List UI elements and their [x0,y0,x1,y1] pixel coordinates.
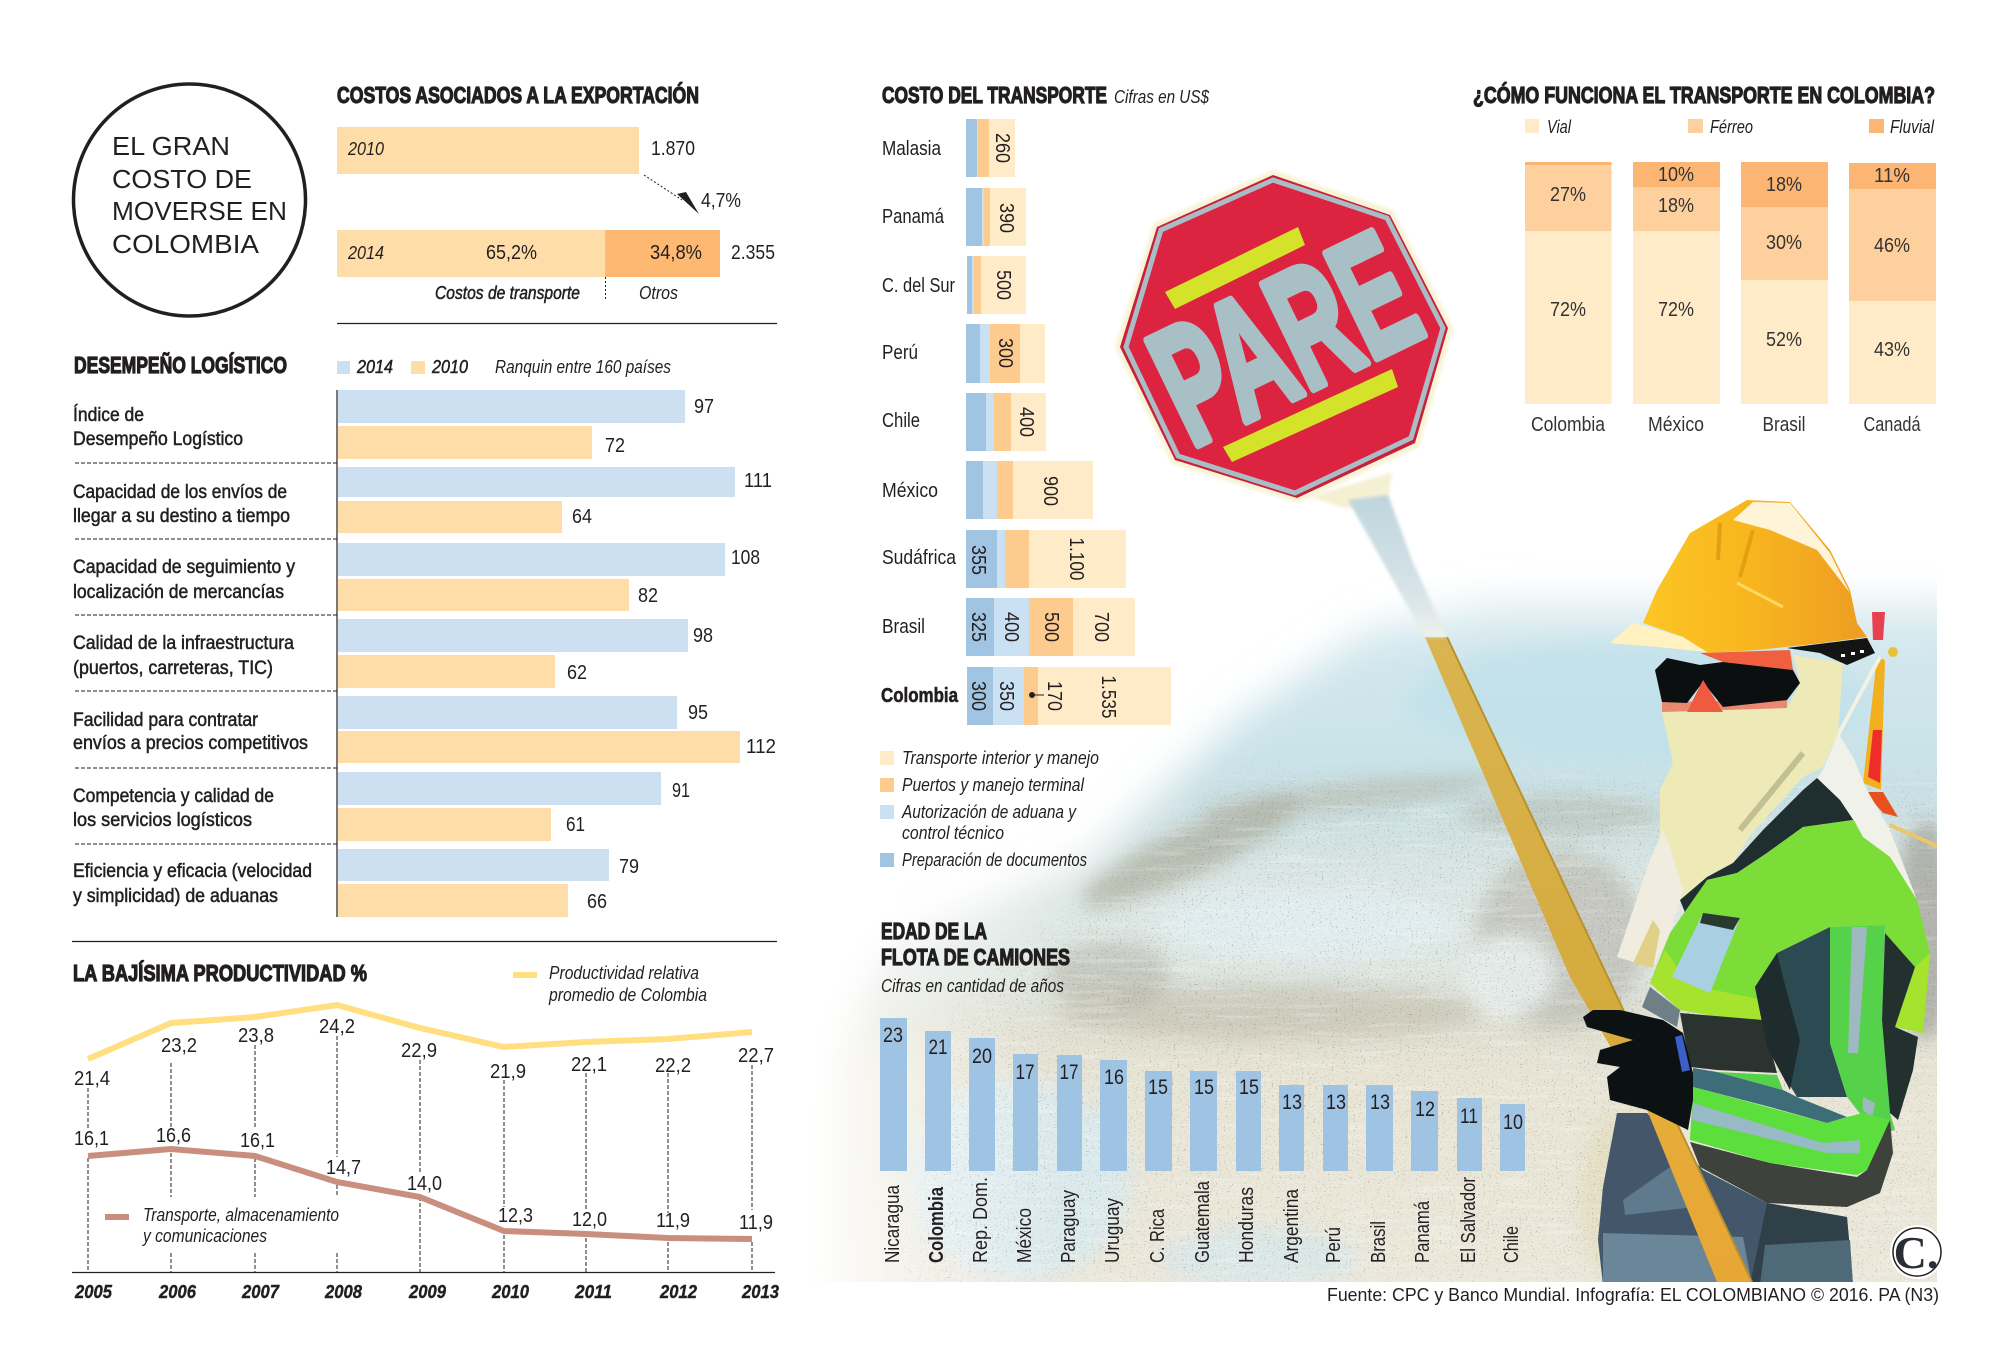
pants [1598,1113,1853,1285]
legend: Transporte interior y manejo [902,748,1099,768]
rotated values: 1.100 [1065,538,1087,580]
bar values: 61 [566,814,585,836]
legend: transporte: Transporte, almacenamiento [143,1205,339,1225]
rotated values: 355 [967,545,989,575]
legend: productividad relativa: promedio de Colombia [548,985,707,1005]
arrow 4,7% [644,175,741,214]
bar values: 95 [688,702,708,724]
stacked bars [966,119,1171,725]
country labels: Honduras [1236,1187,1258,1263]
bar values: 112 [746,736,776,758]
bar values: 108 [731,547,760,569]
year axis labels: 2006 [158,1282,197,1302]
bar values: 91 [672,780,690,802]
data labels: productividad: 22,7 [738,1045,774,1067]
heading: FLOTA DE CAMIONES [881,944,1070,970]
heading: COSTOS ASOCIADOS A LA EXPORTACIÓN [337,81,699,108]
country labels: Argentina [1281,1188,1303,1263]
data labels: productividad: 21,9 [490,1061,526,1083]
percentage labels: 27% [1550,184,1586,206]
rotated values: 260 [991,133,1013,163]
legend: productividad relativa: Productividad relativa [549,963,699,983]
rotated values: 1.535 [1097,676,1119,718]
bar values: 21 [928,1036,948,1059]
bar values: 15 [1194,1076,1214,1099]
legend: Puertos y manejo terminal [902,775,1085,795]
data labels: productividad: 23,2 [161,1035,197,1057]
bar values: 12 [1415,1098,1435,1121]
country labels: Paraguay [1058,1190,1080,1263]
country labels: C. Rica [1147,1208,1169,1263]
country labels: Nicaragua [882,1184,904,1263]
data labels: productividad: 22,1 [571,1054,607,1076]
row labels: Índice de [73,405,144,426]
bar values: 13 [1282,1091,1302,1114]
legend: Vial [1547,117,1572,137]
rotated values: 170 [1043,681,1065,711]
year axis labels: 2012 [659,1282,697,1302]
country labels [882,1177,1523,1263]
hood [1617,655,1917,968]
title badge: circle: MOVERSE EN [112,196,287,226]
bar values: 20 [972,1045,992,1068]
legend: transporte [105,1205,339,1246]
legend [337,357,671,377]
pole [1425,637,1752,1282]
rotated values: 400 [1015,407,1037,437]
heading: EDAD DE LA [881,918,987,944]
data labels: productividad: 21,4 [74,1068,110,1090]
bar values: 79 [619,856,639,878]
row labels: Competencia y calidad de [73,786,274,807]
panel: cómo funciona el transporte en Colombia [1473,81,1936,436]
title badge: circle: COLOMBIA [112,229,260,259]
legend: Fluvial [1890,117,1935,137]
percentage labels: 52% [1766,329,1802,351]
percentage labels: 72% [1550,299,1586,321]
country labels: Colombia [1531,414,1606,436]
data labels: transporte: 16,1 [74,1128,109,1150]
glove [1583,1010,1693,1130]
arrow 4,7%: 4,7% [701,190,741,212]
dark arm [1680,1013,1777,1073]
country labels: El Salvador [1458,1177,1480,1263]
country labels: Malasia [882,138,942,160]
bar 2010 [337,127,695,174]
percentage labels: 43% [1874,339,1910,361]
country labels: México [1014,1208,1036,1263]
data labels: productividad: 22,9 [401,1040,437,1062]
line: productividad relativa [88,1005,752,1059]
year axis labels: 2005 [74,1282,113,1302]
data labels: transporte: 14,0 [407,1173,442,1195]
bar values: 11 [1460,1105,1478,1128]
rotated values: 400 [1000,612,1022,642]
percentage labels: 18% [1766,174,1802,196]
country labels: México [1648,414,1704,436]
stacked bars [1525,162,1936,404]
line: transporte [88,1149,752,1239]
legend: Férreo [1710,117,1753,137]
data labels: transporte: 11,9 [739,1212,773,1234]
row labels: y simplicidad) de aduanas [73,886,278,907]
bar values: 98 [693,625,713,647]
legend [1525,117,1935,137]
country labels: Chile [1501,1226,1523,1263]
bar values [566,396,776,913]
country labels: Chile [882,410,920,432]
bar values [883,1024,1523,1134]
back panel [1882,933,1918,1120]
year axis labels: 2008 [324,1282,362,1302]
row labels: llegar a su destino a tiempo [73,506,290,527]
icon: traffic cone [1837,612,1937,846]
bar values: 15 [1148,1076,1168,1099]
year axis labels: 2009 [408,1282,446,1302]
percentage labels: 11% [1874,165,1910,187]
sleeve [1755,927,1847,1097]
legend: Preparación de documentos [902,850,1087,870]
legend: control técnico [902,823,1004,843]
row labels: Eficiencia y eficacia (velocidad [73,861,312,882]
bar values: 82 [638,585,658,607]
data labels: transporte: 16,6 [156,1125,191,1147]
data labels: transporte: 12,0 [572,1209,607,1231]
bar values: 13 [1370,1091,1390,1114]
row labels: Facilidad para contratar [73,710,259,731]
percentage labels: 30% [1766,232,1802,254]
row labels: (puertos, carreteras, TIC) [73,658,273,679]
data labels: transporte: 14,7 [326,1157,361,1179]
data labels: transporte: 12,3 [498,1205,533,1227]
year axis labels [74,1282,779,1302]
bar 2014: Otros [639,283,678,303]
country labels: Uruguay [1102,1198,1124,1263]
bar 2010: 1.870 [651,138,695,160]
row labels: Desempeño Logístico [73,429,243,450]
wrist [1693,1068,1847,1123]
legend: Autorización de aduana y [901,802,1077,822]
photo background: road surface [760,600,1980,1320]
illustration: stop sign PARE: PARE [1125,196,1444,480]
country labels: Colombia [926,1186,948,1263]
legend: 2010 [431,357,468,377]
country labels [881,138,959,707]
bar values: 111 [744,470,772,492]
year axis labels: 2011 [574,1282,612,1302]
title badge: circle: COSTO DE [112,164,252,194]
year axis labels: 2013 [741,1282,779,1302]
vest badge [1672,913,1740,993]
row labels: envíos a precios competitivos [73,733,308,754]
panel: desempeño logístico [73,351,776,917]
icon: El Colombiano logo: C. [1894,1227,1938,1278]
title badge: circle [74,84,306,316]
bar values: 17 [1016,1061,1034,1084]
bar values: 13 [1326,1091,1346,1114]
source credit: Fuente: CPC y Banco Mundial. Infografía: EL COLOMBIANO © 2016. PA (N3) [1327,1285,1939,1305]
legend [880,748,1099,870]
collar [1680,778,1860,912]
country labels: Panamá [882,206,945,228]
legend: transporte: y comunicaciones [141,1226,267,1246]
country labels: Rep. Dom. [970,1177,992,1263]
data labels: productividad: 24,2 [319,1016,355,1038]
country labels [1531,414,1921,436]
bar values: 97 [694,396,714,418]
forearm band [1690,1087,1890,1175]
bars [880,1018,1525,1171]
country labels: Sudáfrica [882,547,957,569]
bar values: 16 [1104,1066,1124,1089]
row labels [73,405,312,907]
rotated values: 300 [967,681,989,711]
sleeve stripe [1830,925,1895,1135]
country labels: Brasil [1762,414,1806,436]
heading [881,918,1070,996]
rotated values: 900 [1039,476,1061,506]
bar values: 66 [587,891,607,913]
data labels: productividad: 22,2 [655,1055,691,1077]
face and glasses [1655,638,1875,712]
legend: productividad relativa [513,963,707,1005]
rotated values: 500 [1040,612,1062,642]
country labels: Perú [882,342,918,364]
rotated values: 390 [995,203,1017,233]
country labels: Perú [1323,1227,1345,1263]
bar 2014: 34,8% [650,242,702,264]
data labels: transporte: 11,9 [656,1210,690,1232]
country labels: Canadá [1864,414,1921,436]
bar 2014 [337,230,775,303]
rotated values: 325 [967,612,989,642]
data labels: productividad: 23,8 [238,1025,274,1047]
rotated values: 300 [994,338,1016,368]
row labels: localización de mercancías [73,582,284,603]
country labels: Brasil [882,616,925,638]
heading: DESEMPEÑO LOGÍSTICO [74,351,287,378]
year axis labels: 2010 [491,1282,529,1302]
bar values: 62 [567,662,587,684]
row labels: Calidad de la infraestructura [73,633,294,654]
belly [1690,1120,1893,1207]
heading: Cifras en cantidad de años [881,976,1064,996]
illustration: stop sign PARE [1115,170,1453,637]
rotated values: 700 [1090,612,1112,642]
data labels: transporte [74,1125,773,1234]
percentage labels [1550,164,1910,361]
percentage labels: 10% [1658,164,1694,186]
data labels: productividad [74,1016,774,1090]
rotated values: 350 [995,681,1017,711]
country labels: C. del Sur [882,275,955,297]
data labels: transporte: 16,1 [240,1130,275,1152]
bar values: 10 [1503,1111,1523,1134]
panel: costo del transporte: Cifras en US$ [1114,87,1210,107]
row labels: los servicios logísticos [73,810,252,831]
hat [1610,500,1867,653]
vest [1650,820,1930,1033]
percentage labels: 46% [1874,235,1910,257]
year axis labels: 2007 [241,1282,280,1302]
panel: la bajísima productividad [72,959,779,1302]
bar values: 72 [605,435,625,457]
bar values: 64 [572,506,592,528]
country labels: Guatemala [1192,1180,1214,1263]
bar 2010: 2010 [347,139,384,159]
country labels: México [882,480,938,502]
bar 2014: 2.355 [731,242,775,264]
heading: COSTO DEL TRANSPORTE [882,82,1107,108]
country labels: Panamá [1412,1200,1434,1263]
percentage labels: 18% [1658,195,1694,217]
bar 2014: 2014 [347,243,384,263]
rotated values [967,133,1119,718]
panel: costos asociados a la exportación [337,81,775,303]
country labels: Brasil [1368,1221,1390,1263]
percentage labels: 72% [1658,299,1694,321]
bar 2014: 65,2% [486,242,537,264]
row labels: Capacidad de los envíos de [73,482,287,503]
title badge: circle: EL GRAN [112,131,230,161]
horizontal bars [338,390,740,917]
panel: edad de la flota de camiones [880,918,1525,1263]
country labels: Colombia [881,685,959,707]
bar values: 15 [1239,1076,1259,1099]
bar values: 23 [883,1024,903,1047]
panel: costo del transporte [880,82,1210,870]
rotated values: 500 [992,270,1014,300]
heading: LA BAJÍSIMA PRODUCTIVIDAD % [73,959,367,986]
bar 2014: Costos de transporte [435,283,580,303]
legend: 2014 [356,357,393,377]
bar values: 17 [1060,1061,1078,1084]
row labels: Capacidad de seguimiento y [73,557,295,578]
illustration: worker holding stop sign [1425,500,1937,1285]
legend: Ranquin entre 160 países [495,357,671,377]
